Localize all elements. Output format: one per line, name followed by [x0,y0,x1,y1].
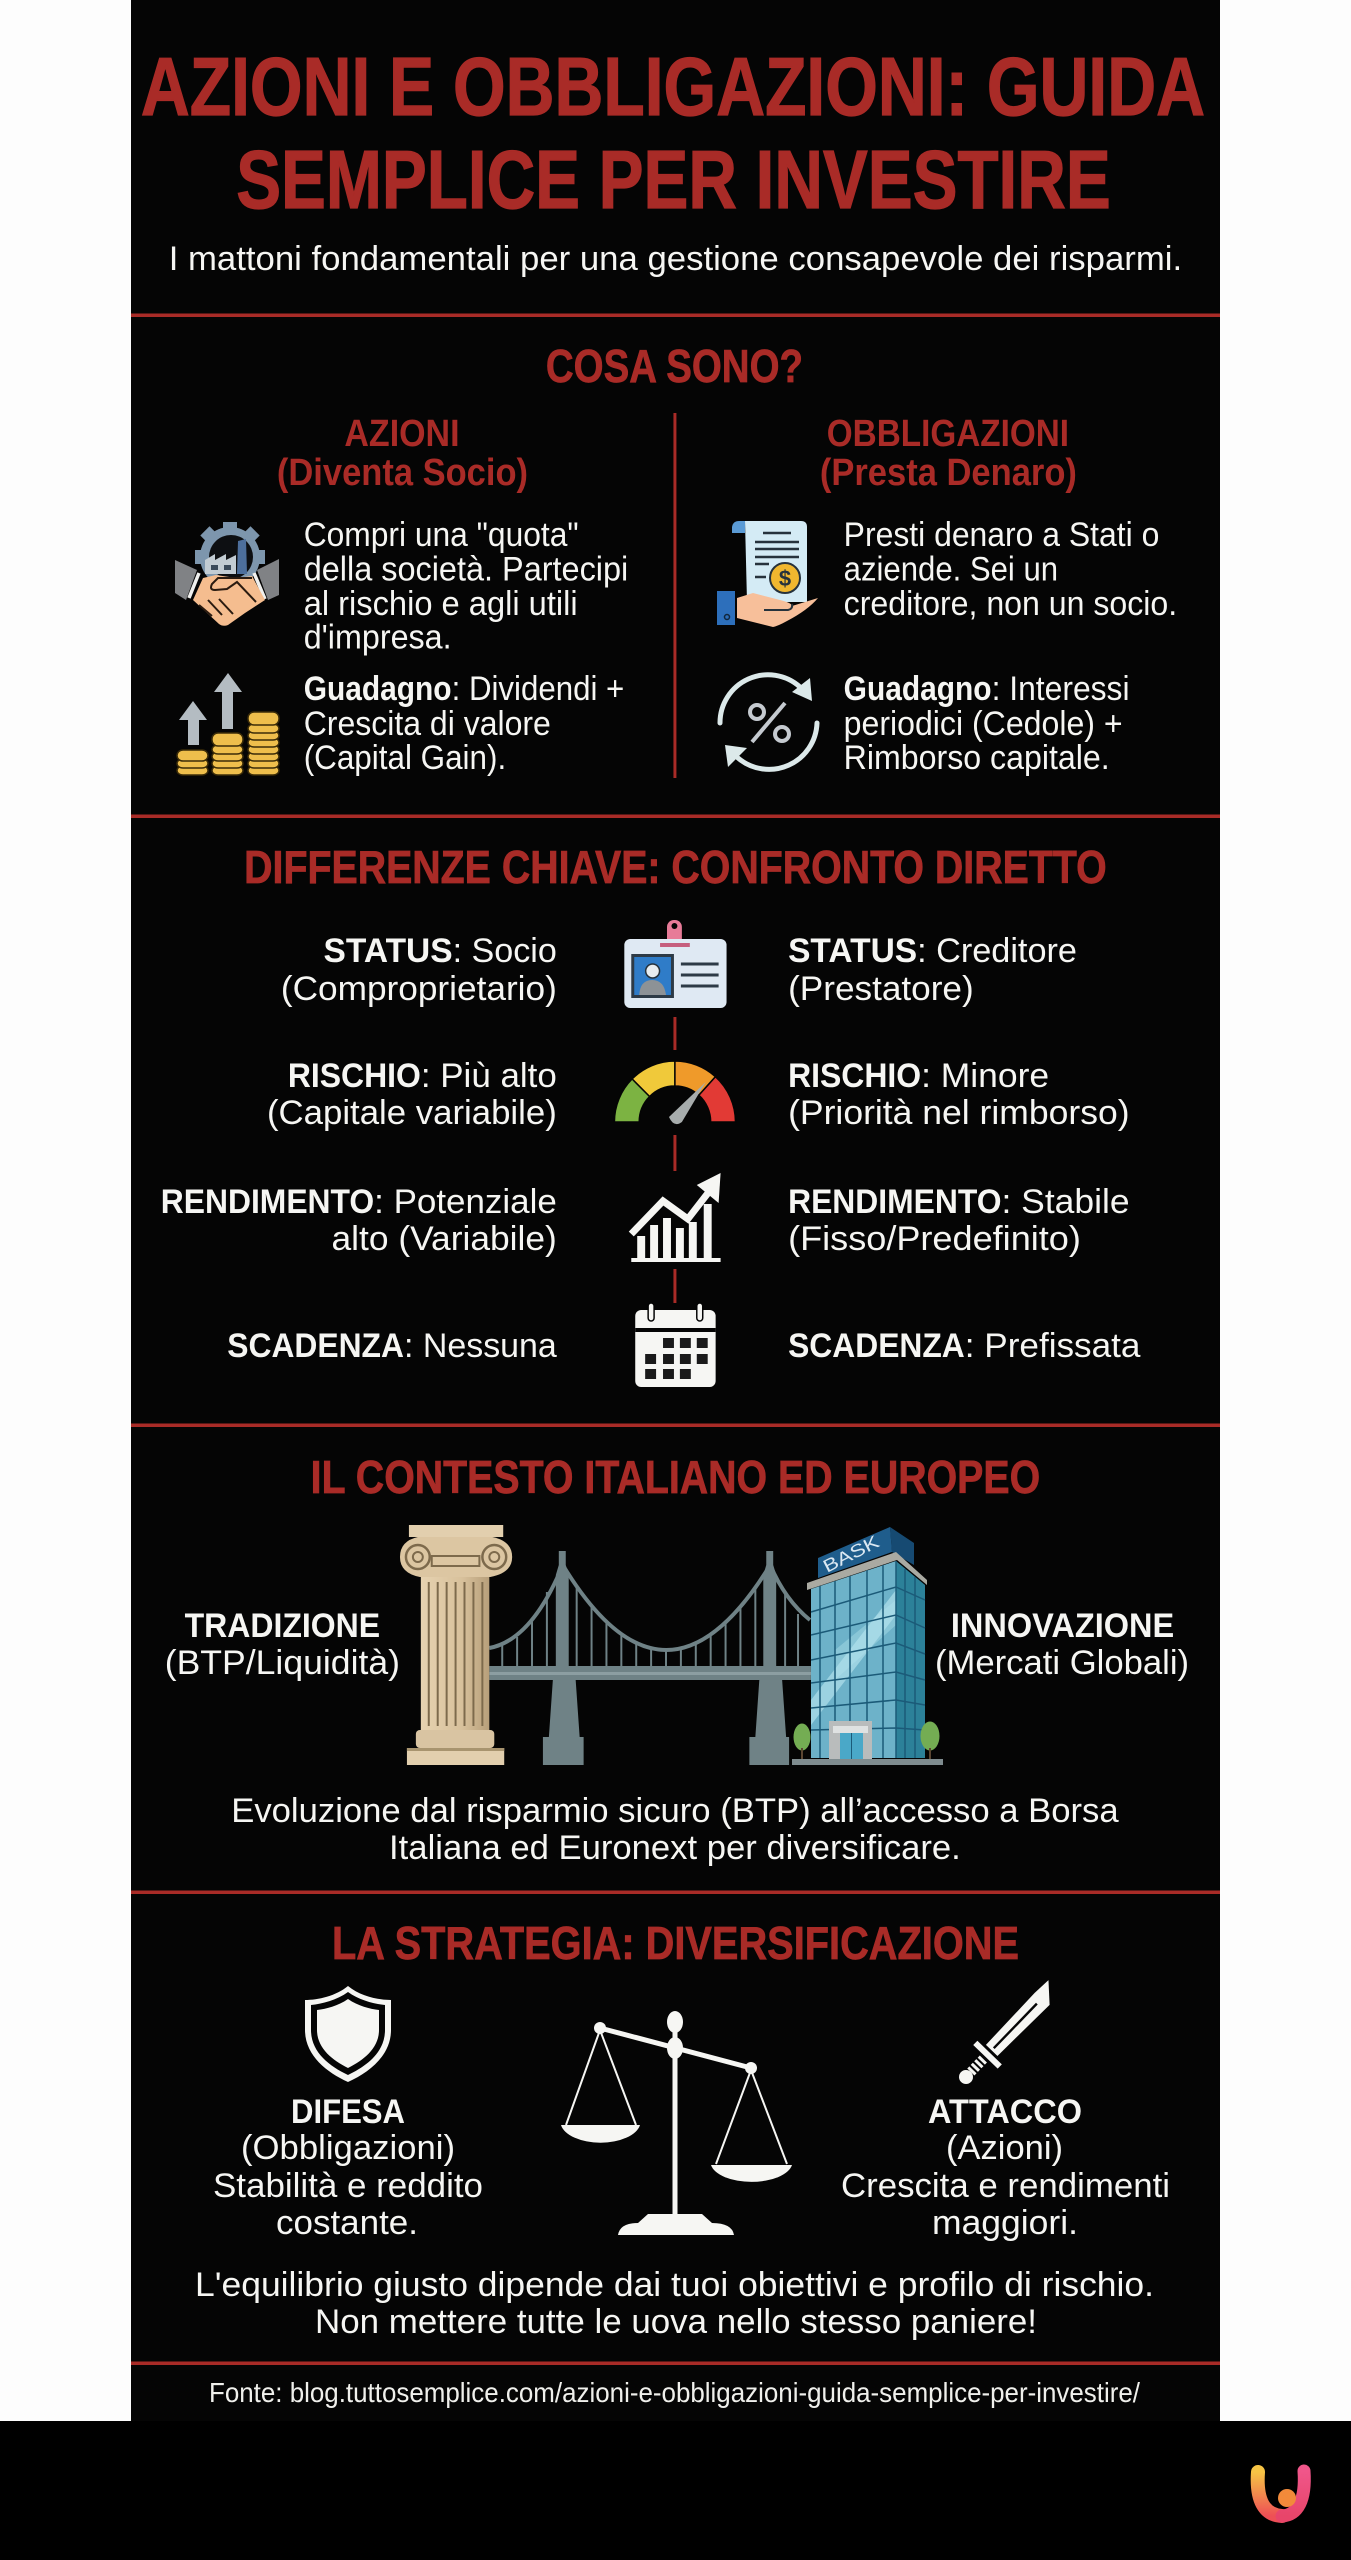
text: obbligazioni definition: Presti denaro a Stati o [844,516,1159,554]
heading: strategia: LA STRATEGIA: DIVERSIFICAZIONE [332,1917,1019,1969]
heading: cosa sono: COSA SONO? [546,341,803,392]
text: azioni definition: d'impresa. [304,618,452,657]
text: obbligazioni guadagno: periodici (Cedole) + [844,705,1123,743]
heading: differenze chiave: DIFFERENZE CHIAVE: CONFRONTO DIRETTO [244,842,1107,893]
text: azioni guadagno: Guadagno [304,670,452,708]
icon: shield [305,1986,391,2082]
illustration: glass bank building: BASK [820,1532,882,1577]
text: attacco [841,2093,1170,2242]
icon: percent cycle [720,675,817,769]
row: status right: : Creditore [917,932,1077,970]
row: rendimento right: RENDIMENTO [788,1183,1002,1221]
row: status left: : Socio [453,932,557,970]
row: rendimento right: (Fisso/Predefinito) [788,1220,1081,1258]
text: difesa: DIFESA [291,2093,405,2131]
column heading: obbligazioni: OBBLIGAZIONI [827,413,1069,455]
panel: cosa sono [175,341,1177,778]
icon: contract in hand: $ [779,566,791,591]
row: status right: STATUS [788,932,917,970]
text: equilibrio: Non mettere tutte le uova nello stesso paniere! [315,2303,1037,2341]
text: obbligazioni guadagno: Guadagno [844,670,992,708]
row: scadenza left [227,1327,557,1365]
text: equilibrio [195,2266,1154,2341]
text: difesa: Stabilità e reddito [213,2167,483,2205]
panel: strategia [195,1917,1170,2341]
row: rischio right: RISCHIO [788,1057,921,1095]
illustration: suspension bridge [489,1551,811,1765]
row: status left: (Comproprietario) [281,970,557,1008]
text: difesa [213,2093,483,2242]
row: scadenza left: : Nessuna [404,1327,557,1365]
icon: id badge [624,920,727,1008]
row: rischio left [267,1057,557,1132]
text: obbligazioni definition [844,516,1177,623]
text: azioni definition [304,516,628,657]
row: rischio right: : Minore [921,1057,1049,1095]
row: rendimento right: : Stabile [1002,1183,1130,1221]
text: attacco: ATTACCO [928,2093,1082,2131]
label: tradizione [165,1607,400,1682]
row: rendimento left: RENDIMENTO [161,1183,374,1221]
heading: contesto: IL CONTESTO ITALIANO ED EUROPEO [311,1452,1040,1503]
row: status left: STATUS [324,932,453,970]
text: attacco: (Azioni) [946,2129,1063,2167]
icon: contract in hand [717,521,818,627]
text: evoluzione: Italiana ed Euronext per diversificare. [389,1829,961,1867]
panel: contesto italiano ed europeo [165,1452,1189,1867]
title: SEMPLICE PER INVESTIRE [236,133,1111,226]
icon: balance scale [561,2011,792,2235]
text: difesa: costante. [276,2204,418,2242]
panel: differenze chiave [161,842,1141,1387]
row: scadenza right: : Prefissata [965,1327,1141,1365]
row: rischio left: : Più alto [421,1057,557,1095]
text: obbligazioni guadagno: Rimborso capitale. [844,739,1110,777]
text: equilibrio: L'equilibrio giusto dipende dai tuoi obiettivi e profilo di rischio. [195,2266,1154,2304]
text: difesa: (Obbligazioni) [241,2129,455,2167]
icon: coins and arrows [177,673,279,775]
text: azioni guadagno [304,670,624,777]
row: status left [281,932,557,1008]
column heading: azioni: (Diventa Socio) [277,452,528,494]
row: rendimento right [788,1183,1130,1258]
text: attacco: Crescita e rendimenti [841,2167,1170,2205]
icon: handshake and factory gear [175,522,279,626]
text: obbligazioni definition: aziende. Sei un [844,550,1058,589]
column heading: obbligazioni [820,413,1077,494]
icon: sword [949,1974,1066,2094]
row: status right: (Prestatore) [788,970,974,1008]
label: tradizione: TRADIZIONE [185,1607,380,1645]
row: scadenza right: SCADENZA [788,1327,965,1365]
row: rendimento left [161,1183,557,1258]
text: azioni definition: Compri una "quota" [304,516,579,554]
text: azioni definition: della società. Partecipi [304,550,628,589]
text: azioni guadagno: : Dividendi + [452,670,624,708]
row: rischio left: RISCHIO [288,1057,421,1095]
label: tradizione: (BTP/Liquidità) [165,1644,400,1682]
row: rischio right [788,1057,1130,1132]
label: innovazione: (Mercati Globali) [935,1644,1189,1682]
row: rischio left: (Capitale variabile) [267,1094,557,1132]
icon: risk gauge [614,1061,735,1124]
column heading: obbligazioni: (Presta Denaro) [820,452,1077,494]
row: status right [788,932,1077,1008]
row: scadenza right [788,1327,1141,1365]
column heading: azioni [277,413,528,494]
row: rendimento left: alto (Variabile) [331,1220,557,1258]
text: evoluzione [231,1792,1119,1867]
icon: calendar [635,1303,716,1387]
text: obbligazioni definition: creditore, non un socio. [844,585,1177,623]
illustration: glass bank building [792,1527,943,1765]
label: innovazione: INNOVAZIONE [951,1607,1174,1645]
text: azioni definition: al rischio e agli utili [304,585,578,623]
source line: Fonte: blog.tuttosemplice.com/azioni-e-obbligazioni-guida-semplice-per-investire/ [209,2377,1140,2408]
subtitle: I mattoni fondamentali per una gestione consapevole dei risparmi. [169,240,1182,278]
text: evoluzione: Evoluzione dal risparmio sicuro (BTP) all’accesso a Borsa [231,1792,1119,1830]
text: obbligazioni guadagno: : Interessi [992,670,1130,708]
text: azioni guadagno: Crescita di valore [304,705,551,743]
header [141,40,1205,278]
title [141,40,1205,226]
row: scadenza left: SCADENZA [227,1327,404,1365]
column heading: azioni: AZIONI [344,413,460,455]
text: azioni guadagno: (Capital Gain). [304,739,506,777]
row: rendimento left: : Potenziale [374,1183,557,1221]
illustration: classical column [400,1525,512,1765]
row: rischio right: (Priorità nel rimborso) [788,1094,1130,1132]
label: innovazione [935,1607,1189,1682]
logo [1258,2471,1304,2516]
text: obbligazioni guadagno [844,670,1130,777]
text: attacco: maggiori. [932,2204,1078,2242]
icon: growth chart [631,1173,721,1262]
